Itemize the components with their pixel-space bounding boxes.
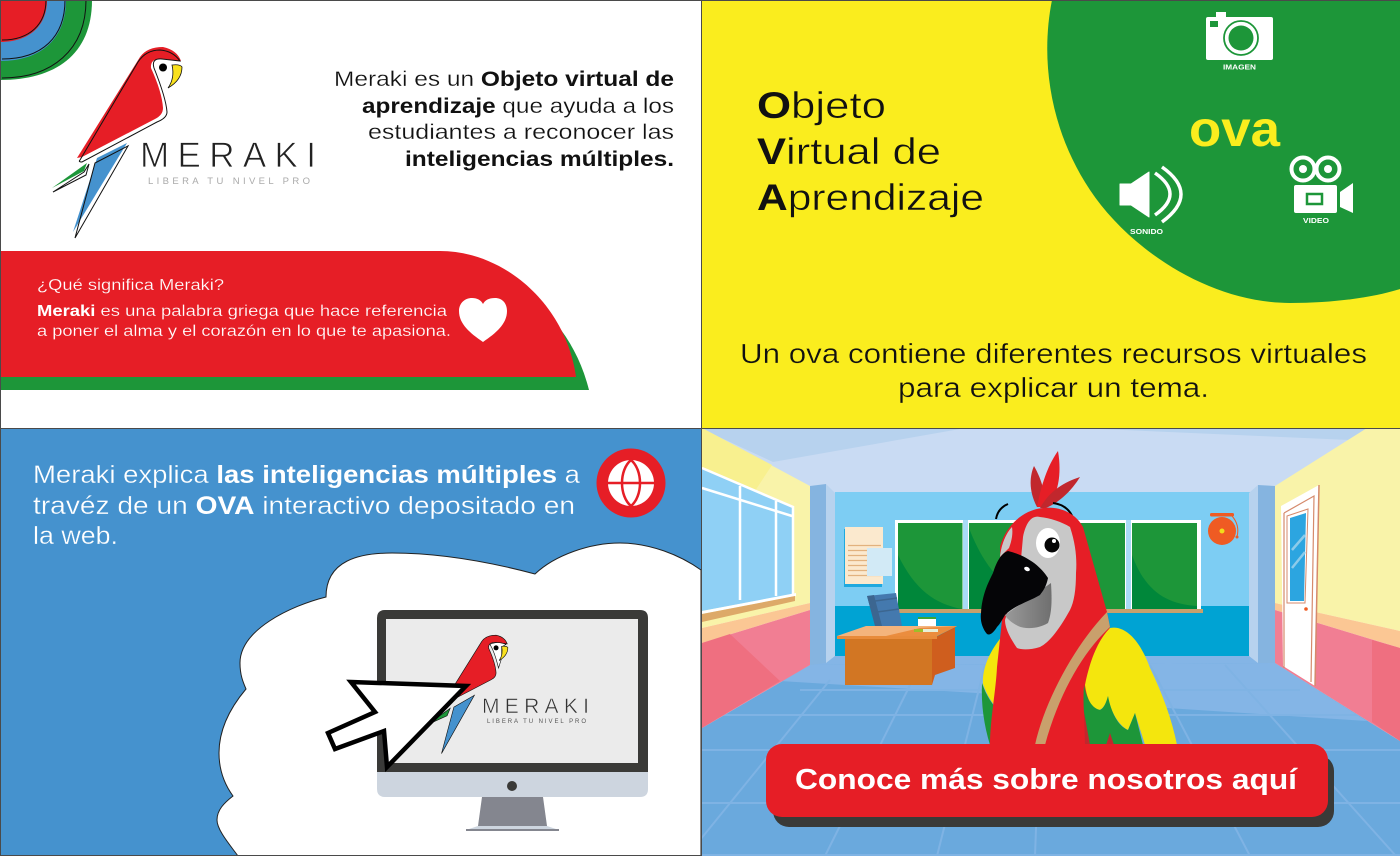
text block: ova description: Un ova contiene diferentes recursos virtuales	[740, 338, 1367, 369]
feathers	[1031, 451, 1080, 508]
text block: multiple intelligences: travéz de un OVA interactivo depositado en	[33, 492, 575, 520]
icon: video camera	[1292, 158, 1353, 225]
cloud	[217, 543, 701, 856]
icon: video camera: VIDEO	[1303, 216, 1329, 225]
right wing	[1084, 628, 1177, 745]
parrot mascot	[981, 451, 1177, 745]
eyebrows	[996, 503, 1073, 519]
panel: what is Meraki	[0, 0, 701, 428]
text block: intro	[334, 68, 674, 171]
lower beak	[1005, 583, 1052, 628]
computer monitor: MERAKI	[482, 695, 589, 718]
banner: what does Meraki mean: a poner el alma y el corazón en lo que te apasiona.	[37, 323, 451, 340]
text block: intro: inteligencias múltiples.	[405, 148, 674, 171]
icon: speaker	[1120, 167, 1181, 236]
text block: multiple intelligences: la web.	[33, 522, 118, 550]
panel: web OVA	[0, 429, 701, 856]
logo wordmark: MERAKI	[140, 136, 316, 175]
banner: what does Meraki mean	[0, 251, 589, 390]
left wall	[702, 428, 810, 728]
button: learn more: Conoce más sobre nosotros aquí	[795, 764, 1298, 796]
body	[990, 508, 1110, 745]
teacher chair	[867, 593, 902, 626]
text block: multiple intelligences: Meraki explica las inteligencias múltiples a	[33, 461, 580, 489]
icon: globe	[596, 448, 666, 518]
left pillar	[810, 484, 835, 665]
text block: intro: aprendizaje que ayuda a los	[362, 95, 674, 118]
upper beak	[981, 551, 1048, 635]
logo wordmark: LIBERA TU NIVEL PRO	[148, 176, 310, 187]
text block: intro: estudiantes a reconocer las	[368, 121, 674, 144]
icon: corner arcs	[0, 0, 92, 80]
text block: ova description	[740, 338, 1367, 403]
icon: heart	[459, 298, 507, 342]
classroom window	[702, 468, 793, 611]
heading: Objeto Virtual de Aprendizaje: Virtual de	[757, 131, 941, 172]
panel: OVA definition	[702, 0, 1400, 428]
ceiling	[702, 429, 1400, 499]
text block: intro: Meraki es un Objeto virtual de	[334, 68, 674, 91]
banner: what does Meraki mean: Meraki es una palabra griega que hace referencia	[37, 303, 447, 320]
text block: multiple intelligences	[33, 461, 580, 550]
computer monitor: LIBERA TU NIVEL PRO	[487, 719, 586, 725]
teacher desk	[837, 617, 957, 685]
chalkboards	[895, 520, 1203, 613]
back wall	[835, 492, 1250, 658]
icon: speaker: SONIDO	[1130, 227, 1163, 236]
logo: Meraki parrot	[52, 47, 182, 238]
face	[1005, 517, 1076, 649]
icon: camera: IMAGEN	[1223, 62, 1256, 72]
button: learn more	[766, 744, 1334, 827]
right wall	[1275, 428, 1400, 741]
panel: classroom scene	[700, 428, 1400, 856]
right pillar	[1249, 485, 1275, 663]
heading: Objeto Virtual de Aprendizaje: Aprendizaje	[757, 177, 984, 218]
poster	[844, 527, 892, 587]
eye	[1036, 528, 1060, 558]
floor	[700, 656, 1400, 856]
heading: Objeto Virtual de Aprendizaje	[757, 85, 984, 218]
shoulder strap	[1035, 612, 1110, 745]
logo on screen	[428, 635, 508, 754]
icon: camera	[1206, 12, 1273, 72]
heading: Objeto Virtual de Aprendizaje: Objeto	[757, 85, 886, 126]
banner: what does Meraki mean: ¿Qué significa Meraki?	[37, 277, 224, 294]
icon: cursor arrow	[328, 682, 466, 767]
left wing	[982, 634, 1006, 745]
label: ova: ova	[1189, 101, 1281, 157]
classroom door	[1281, 485, 1319, 686]
computer monitor	[377, 610, 648, 831]
text block: ova description: para explicar un tema.	[898, 372, 1209, 403]
bell	[1208, 513, 1238, 545]
green blob	[1047, 0, 1400, 303]
